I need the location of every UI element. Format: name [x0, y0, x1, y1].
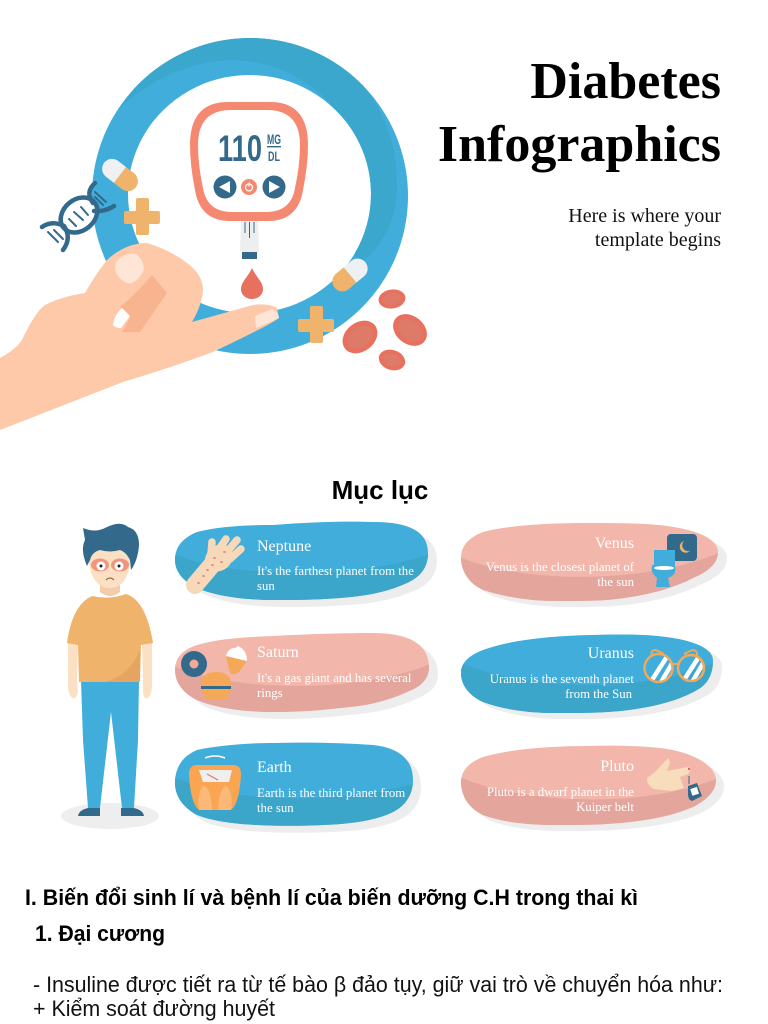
- title: Infographics: [438, 116, 721, 173]
- icon: capsule upper: [98, 155, 142, 195]
- description: [257, 671, 412, 700]
- description: Uranus is the seventh planet: [490, 672, 634, 686]
- icon: red blood cells: [336, 288, 433, 374]
- label: Uranus: [588, 645, 634, 662]
- section heading: I. Biến đổi sinh lí và bệnh lí của biến dưỡng C.H trong thai kì: [25, 885, 638, 910]
- T-shirt: [67, 594, 153, 682]
- contents heading: Mục lục: [332, 475, 428, 505]
- label: Pluto: [600, 758, 634, 775]
- panel: Earth: [170, 738, 421, 833]
- description: Kuiper belt: [576, 800, 634, 814]
- blue ring: [92, 38, 408, 354]
- subtitle: template begins: [595, 229, 721, 251]
- icon: donut, cupcake and burger: [181, 646, 247, 699]
- body text: - Insuline được tiết ra từ tế bào β đảo tụy, giữ vai trò về chuyển hóa như:: [33, 972, 723, 997]
- figure: man with symptoms: [61, 524, 159, 829]
- description: from the Sun: [565, 687, 633, 701]
- icon: toilet and night tile: [652, 534, 697, 587]
- description: [257, 564, 414, 593]
- icon: glasses: [644, 650, 705, 684]
- icon: weighing scale: [189, 756, 241, 810]
- subtitle: Here is where your: [568, 205, 721, 227]
- icon: blood drop: [241, 268, 263, 299]
- panel: Neptune: [170, 515, 437, 607]
- description: rings: [257, 686, 283, 700]
- description: Venus is the closest planet of: [486, 560, 635, 574]
- icon: glucose meter: 110: [218, 128, 262, 169]
- label: Venus: [595, 535, 634, 552]
- description: [490, 672, 634, 701]
- description: the sun: [597, 575, 635, 589]
- trousers: [81, 680, 139, 808]
- neck: [100, 580, 120, 596]
- panel: Venus: [461, 523, 727, 607]
- panel: Uranus: [455, 628, 722, 719]
- icon: hand with rash: [195, 539, 241, 585]
- label: Neptune: [257, 538, 311, 555]
- subtitle: [568, 205, 721, 251]
- description: It's a gas giant and has several: [257, 671, 412, 685]
- icon: finger prick and test bottle: [647, 758, 702, 801]
- illustration: blood glucose hero: [0, 20, 433, 430]
- body text: [33, 972, 723, 1021]
- icon: plus lower: [298, 306, 334, 343]
- description: Pluto is a dwarf planet in the: [487, 785, 634, 799]
- icon: glucose meter: MG: [267, 131, 281, 147]
- face: [88, 548, 131, 588]
- icon: DNA helix: [42, 183, 114, 250]
- icon: plus upper: [124, 198, 160, 235]
- title: [438, 53, 721, 173]
- title: Diabetes: [530, 53, 721, 110]
- description: [257, 786, 405, 815]
- subsection heading: 1. Đại cương: [35, 921, 165, 946]
- shoes: [78, 808, 144, 816]
- description: [486, 560, 635, 589]
- description: [487, 785, 634, 814]
- hair: [83, 524, 139, 570]
- label: Saturn: [257, 644, 299, 661]
- body text: + Kiểm soát đường huyết: [33, 996, 275, 1021]
- description: Earth is the third planet from: [257, 786, 405, 800]
- arms: [68, 640, 152, 698]
- eyes: [91, 558, 129, 580]
- icon: glucose meter: DL: [268, 148, 280, 164]
- panel: Pluto: [455, 740, 725, 831]
- hand pricking finger: [0, 243, 279, 430]
- description: the sun: [257, 801, 294, 815]
- icon: capsule lower: [328, 254, 372, 296]
- icon: glucose meter: [190, 102, 308, 259]
- panel: Saturn: [175, 633, 438, 719]
- label: Earth: [257, 759, 292, 776]
- ground shadow: [61, 803, 159, 829]
- description: It's the farthest planet from the: [257, 564, 414, 578]
- description: sun: [257, 579, 275, 593]
